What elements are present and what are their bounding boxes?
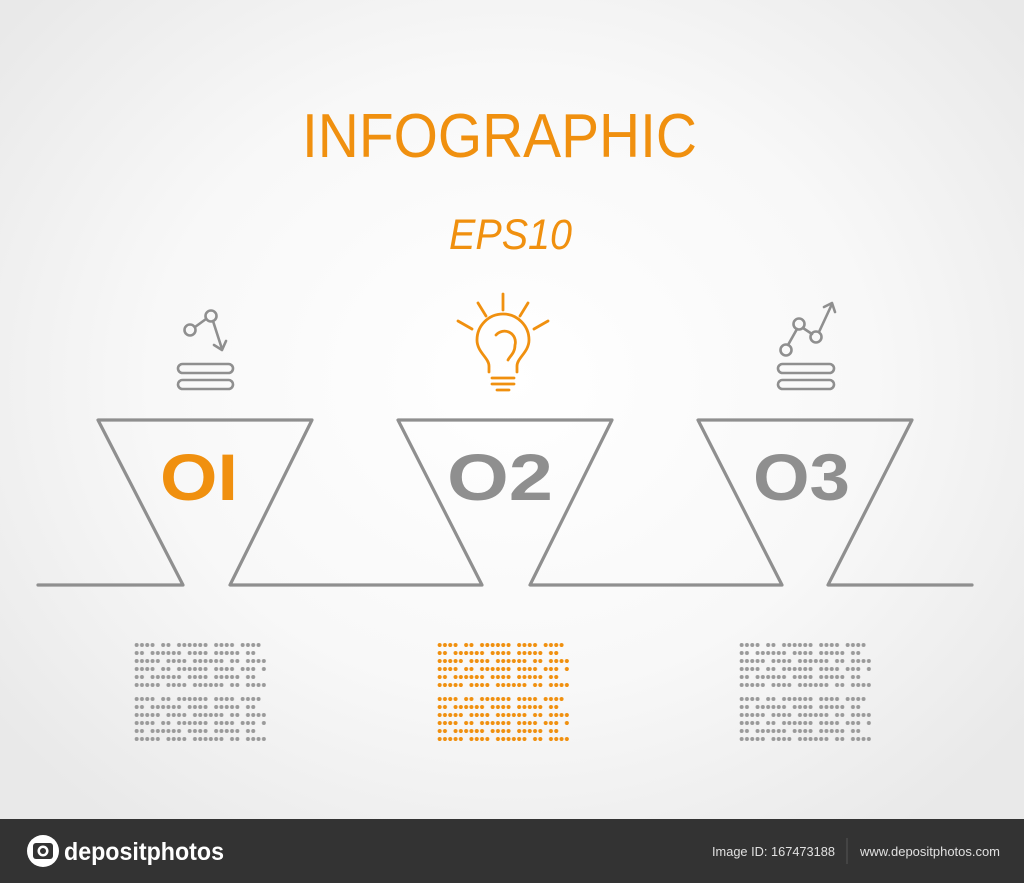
number 03: O3 <box>753 440 850 514</box>
number 02: O2 <box>447 440 553 514</box>
icon: chart down <box>178 310 233 389</box>
icon: lightbulb <box>458 294 548 390</box>
footer url: www.depositphotos.com <box>859 844 1000 859</box>
text block 1 <box>134 641 266 743</box>
text block 3 <box>739 641 872 743</box>
subtitle: EPS10 <box>449 211 572 259</box>
title: INFOGRAPHIC <box>302 102 697 171</box>
number 01: OI <box>160 440 238 514</box>
footer image id: Image ID: 167473188 <box>712 844 835 859</box>
footer bar <box>0 819 1024 883</box>
icon: chart up <box>778 303 835 389</box>
footer logo: depositphotos <box>64 838 224 866</box>
text block 2 <box>437 641 570 743</box>
zigzag timeline <box>38 420 972 585</box>
footer logo <box>27 835 224 867</box>
